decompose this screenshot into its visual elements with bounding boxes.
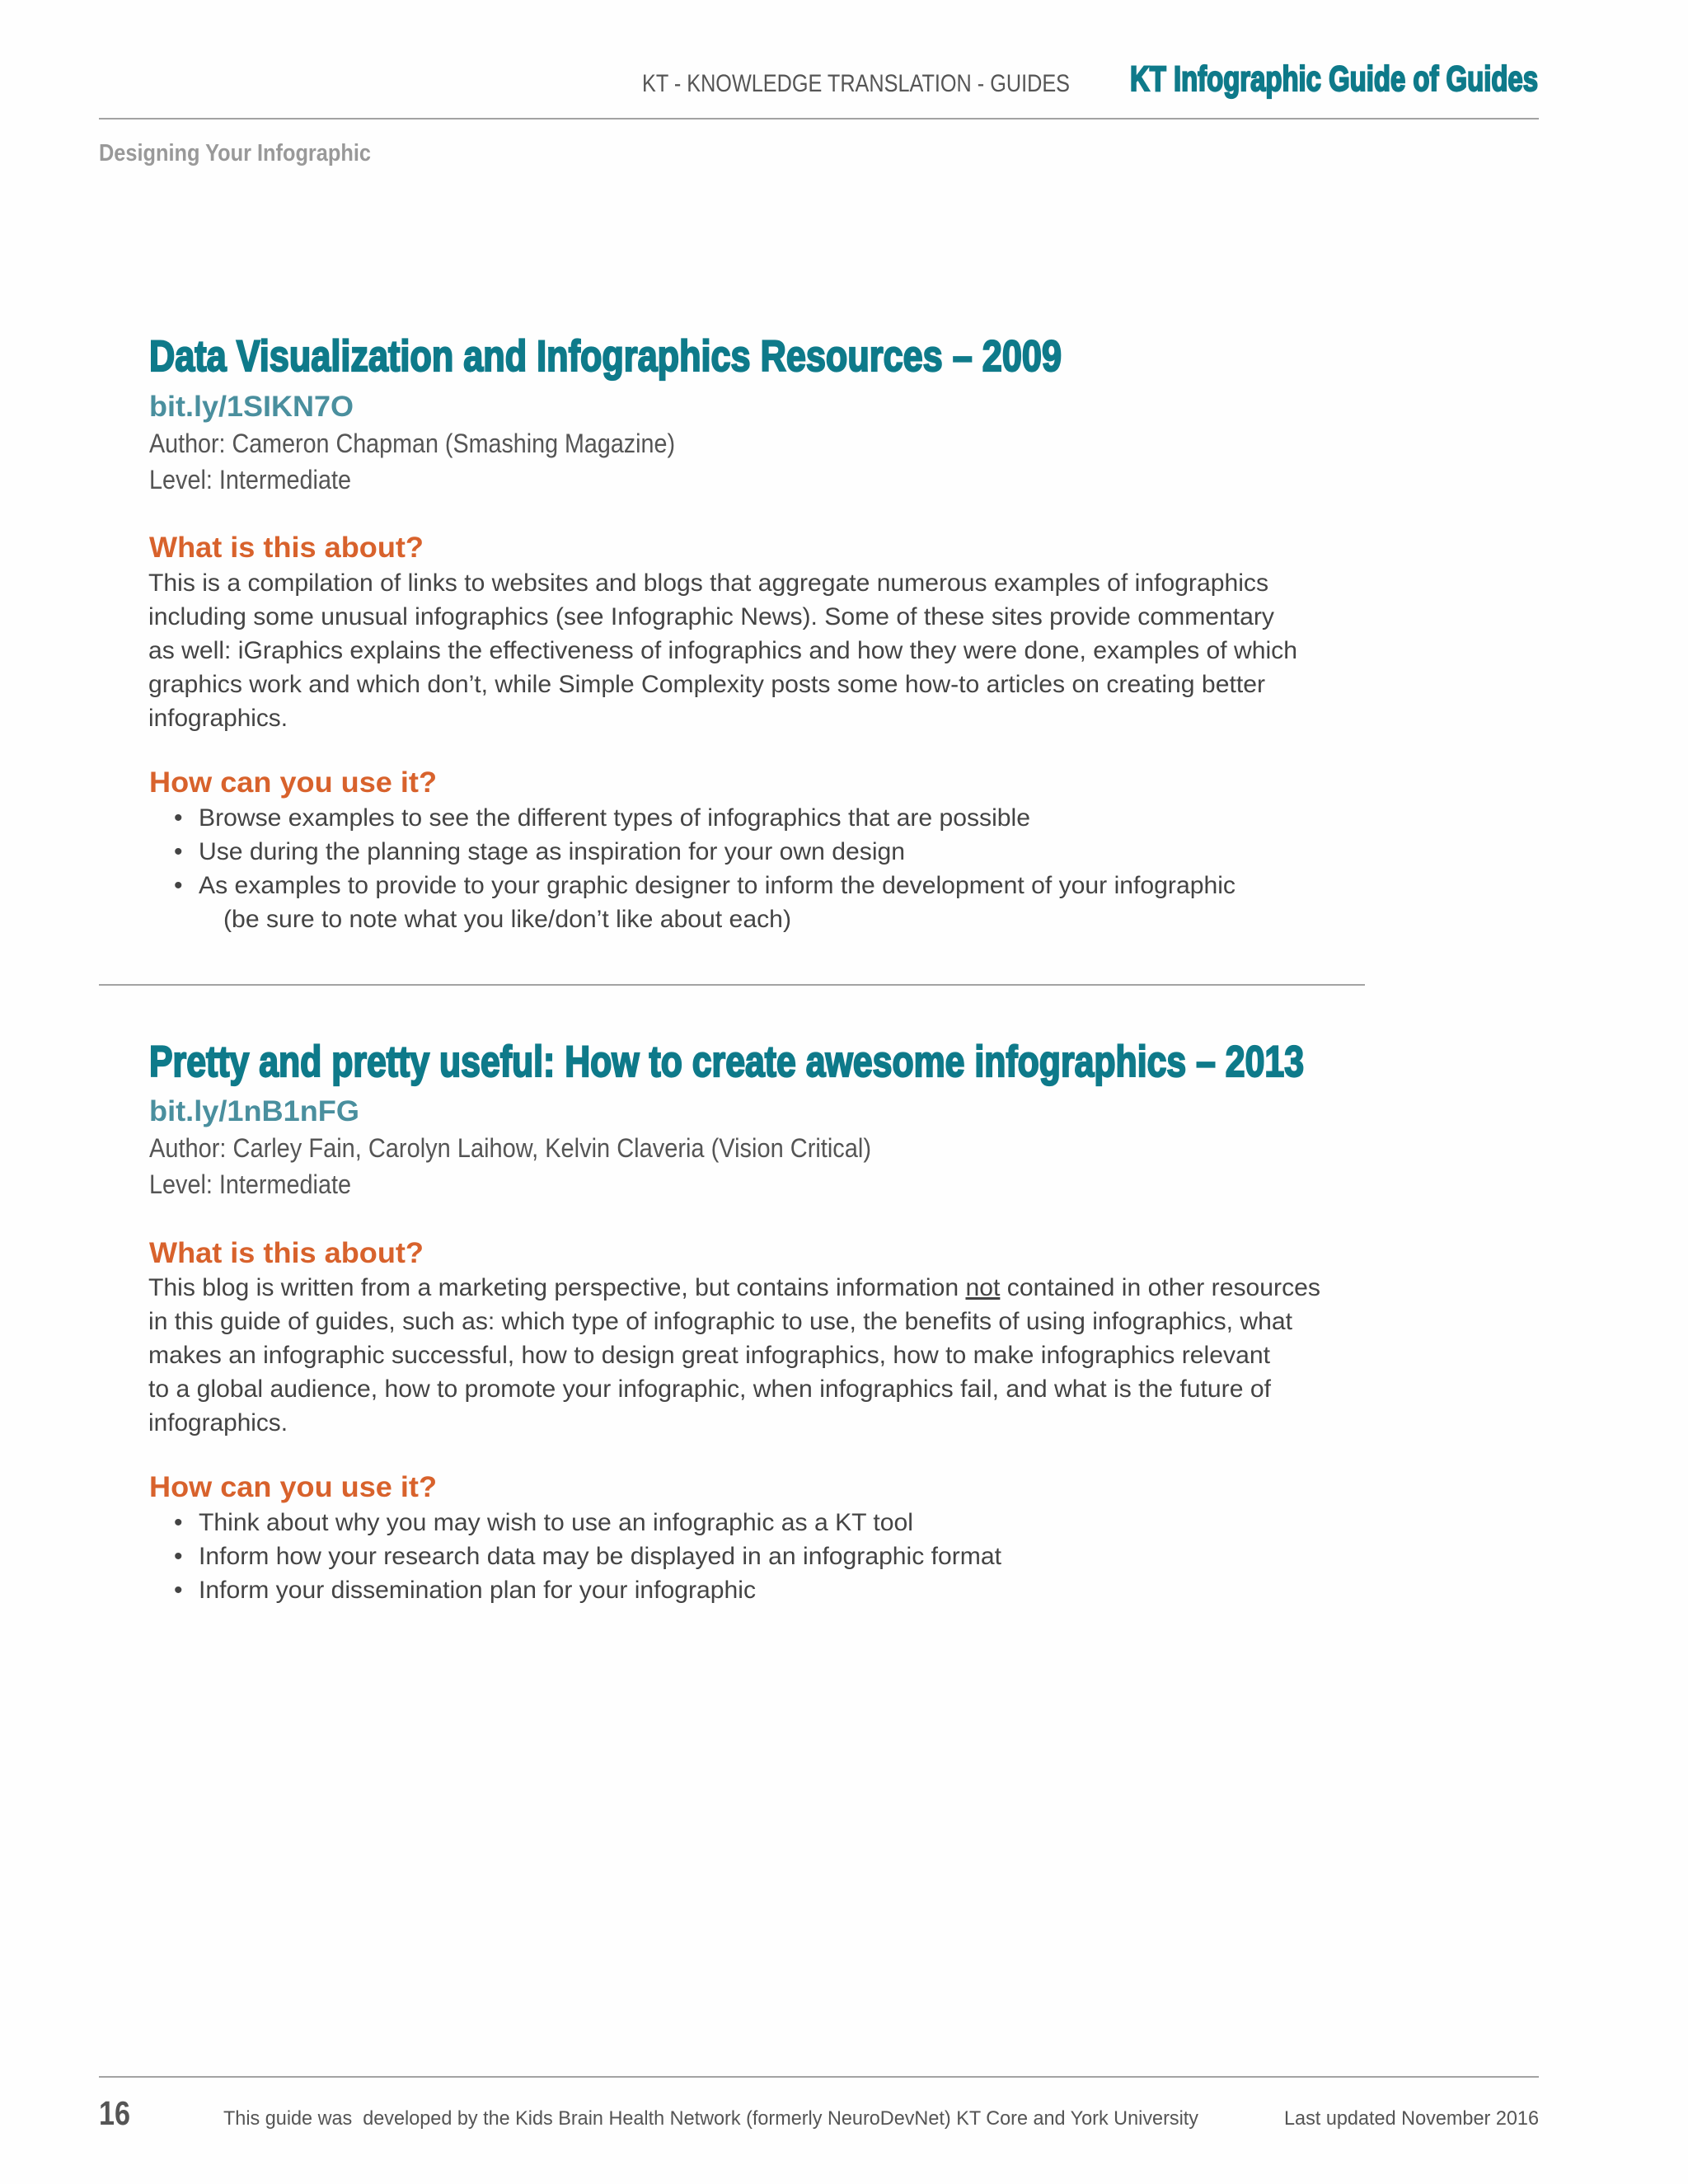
author: resource 1: Author: Cameron Chapman (Smashing Magazine) [149,429,675,458]
bullet list: uses 1: • [174,838,183,865]
section label: Designing Your Infographic [99,140,371,166]
link: resource 1: bit.ly/1SIKN7O [149,391,354,423]
bullet list: uses 2: • [174,1543,183,1570]
bullet list: uses 2 [174,1509,1002,1604]
link: resource 2: bit.ly/1nB1nFG [149,1095,359,1127]
last updated: Last updated November 2016 [1284,2107,1539,2130]
text block: description 2: infographics. [148,1409,288,1436]
header label: KT - KNOWLEDGE TRANSLATION - GUIDES [642,70,1070,97]
text block: description 2: This blog is written from a marketing perspective, but contains information not contained in other resources [148,1274,1320,1301]
heading: how can you use it: How can you use it? [149,1471,437,1503]
page number: 16 [99,2094,130,2132]
text block: description 2 [148,1274,1320,1436]
page footer [99,2094,1539,2132]
bullet list: uses 2: Inform your dissemination plan for your infographic [199,1577,756,1604]
heading: what is this about: What is this about? [149,532,424,564]
bullet list: uses 2: • [174,1509,183,1536]
heading: resource 2 title: Pretty and pretty useful: How to create awesome infographics – 2013 [149,1038,1304,1086]
bullet list: uses 1: • [174,804,183,832]
text block: description 1: including some unusual infographics (see Infographic News). Some of these sites provide commentary [148,603,1274,630]
heading: what is this about: What is this about? [149,1237,424,1269]
bullet list: uses 2: • [174,1577,183,1604]
text block: description 1: as well: iGraphics explains the effectiveness of infographics and how they were done, examples of which [148,637,1297,664]
text block: description 2: to a global audience, how to promote your infographic, when infographics fail, and what is the future of [148,1376,1272,1403]
bullet list: uses 2: Think about why you may wish to use an infographic as a KT tool [199,1509,913,1536]
bullet list: uses 1: Use during the planning stage as inspiration for your own design [199,838,905,865]
text block: description 2: in this guide of guides, such as: which type of infographic to use, the benefits of using infographics, what [148,1308,1293,1335]
panel: resource 1 [148,332,1297,933]
page header [642,59,1538,99]
text block: description 1: This is a compilation of links to websites and blogs that aggregate numerous examples of infographics [148,569,1268,597]
bullet list: uses 1: As examples to provide to your graphic designer to inform the development of your infographic [199,872,1236,899]
heading: resource 1 title: Data Visualization and Infographics Resources – 2009 [149,332,1062,381]
text block: description 1 [148,569,1297,732]
panel: resource 2 [148,1038,1320,1604]
bullet list: uses 1 [174,804,1236,933]
text block: description 2: makes an infographic successful, how to design great infographics, how to make infographics relevant [148,1342,1271,1369]
bullet list: uses 2: Inform how your research data may be displayed in an infographic format [199,1543,1002,1570]
guide title: KT Infographic Guide of Guides [1130,59,1538,99]
bullet list: uses 1: • [174,872,183,899]
level: resource 1: Level: Intermediate [149,465,351,494]
level: resource 2: Level: Intermediate [149,1169,351,1199]
author: resource 2: Author: Carley Fain, Carolyn Laihow, Kelvin Claveria (Vision Critical) [149,1133,871,1163]
bullet list: uses 1: Browse examples to see the different types of infographics that are possible [199,804,1030,832]
footer credit: This guide was developed by the Kids Brain Health Network (formerly NeuroDevNet) KT Core and York University [223,2107,1198,2130]
text block: description 1: infographics. [148,705,288,732]
text block: description 1: graphics work and which don’t, while Simple Complexity posts some how-to articles on creating better [148,671,1265,698]
heading: how can you use it: How can you use it? [149,766,437,799]
bullet list: uses 1: (be sure to note what you like/don’t like about each) [223,906,791,933]
